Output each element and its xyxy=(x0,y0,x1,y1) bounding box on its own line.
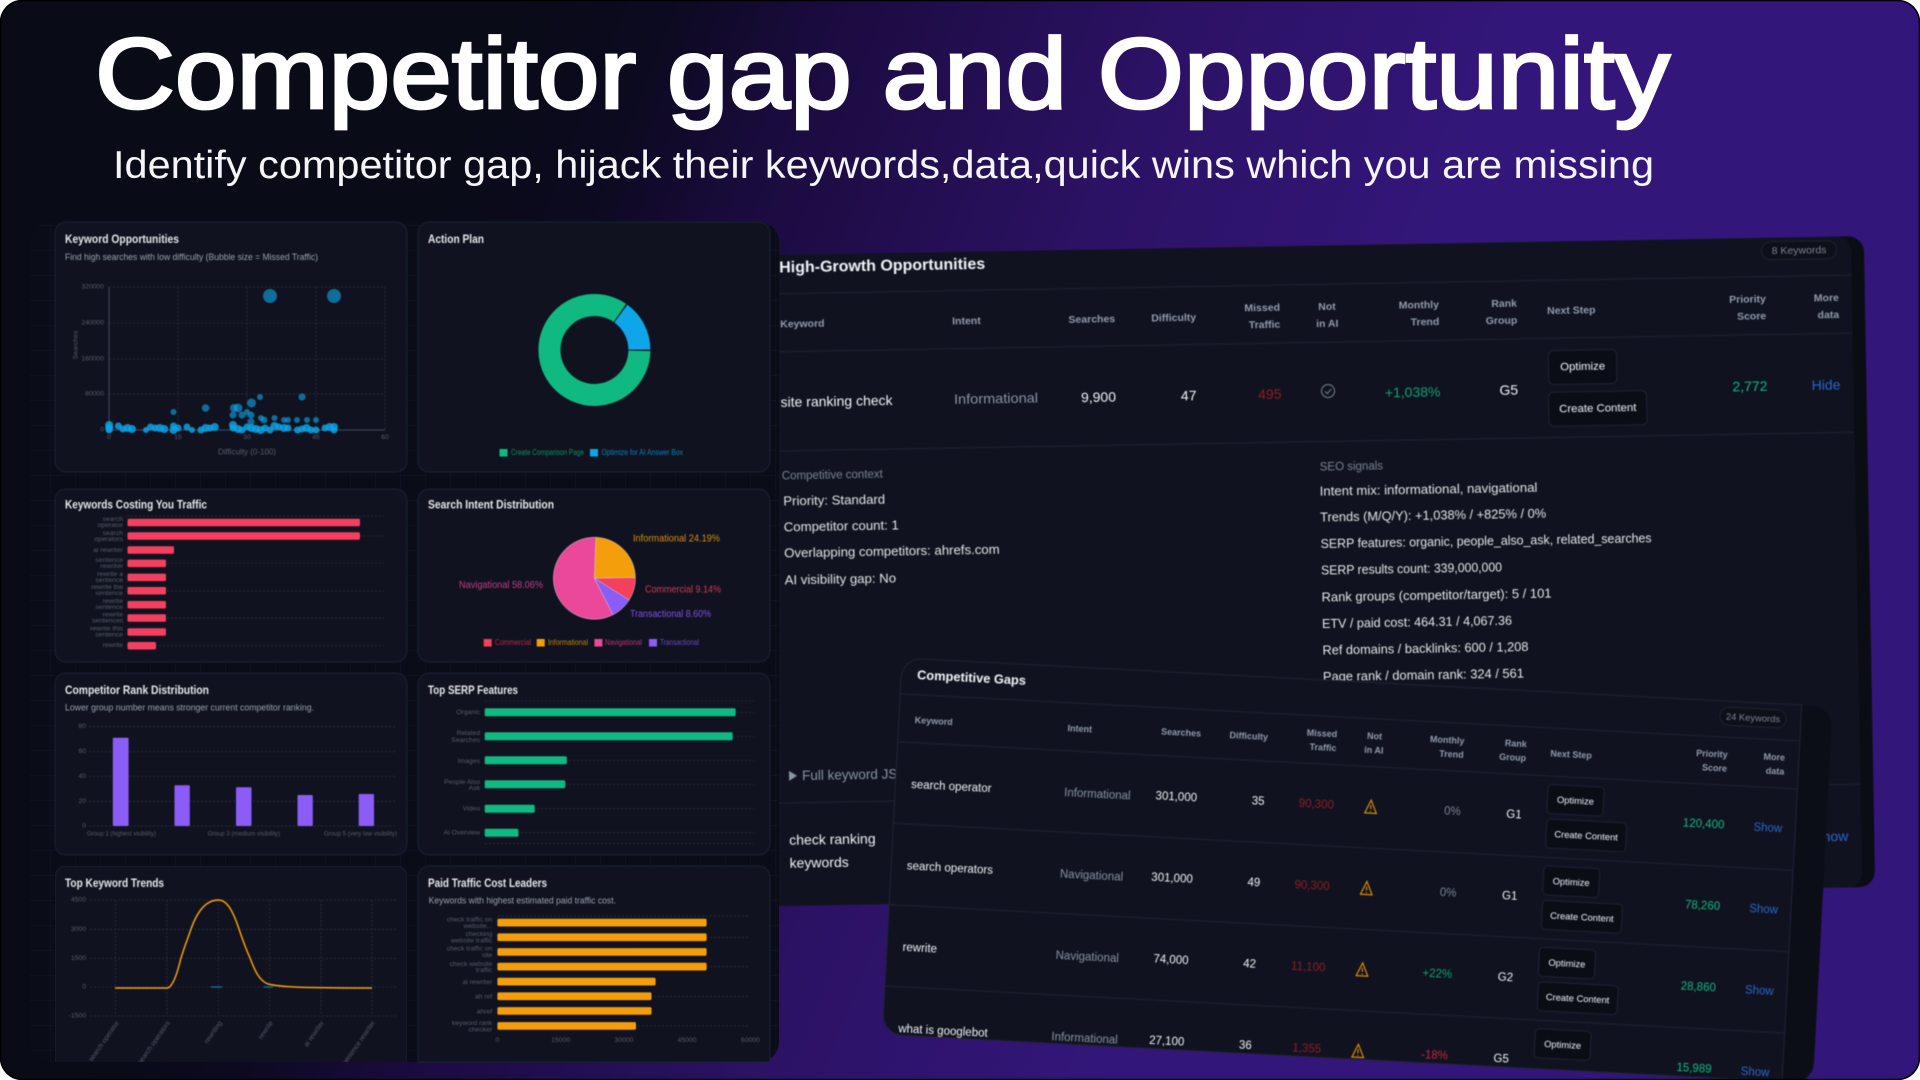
table row: search operator: 0% xyxy=(1444,805,1461,818)
horizontal bar chart: rewrite xyxy=(103,612,123,618)
table row: search operator: Show xyxy=(1753,822,1783,835)
line chart: 0 xyxy=(82,984,86,990)
horizontal bar chart: operator xyxy=(98,522,124,529)
horizontal bar chart: 0 xyxy=(496,1037,500,1044)
table row: check ranking keywords: Show xyxy=(1813,828,1849,845)
table row: check ranking keywords xyxy=(789,832,1849,872)
button: Optimize xyxy=(1542,866,1600,898)
table row: what is googlebot: 36 xyxy=(1239,1040,1252,1052)
table row: rewrite: rewrite xyxy=(902,942,937,956)
table row: site ranking check: 2,772 xyxy=(1732,378,1768,394)
pie labels: Transactional 8.60% xyxy=(630,609,711,620)
table row: site ranking check: Informational xyxy=(954,390,1038,407)
table header row: Trend xyxy=(1439,748,1464,760)
pie labels: Navigational 58.06% xyxy=(459,580,543,591)
horizontal bar chart: Video xyxy=(463,806,480,812)
heading: Competitor Rank Distribution xyxy=(65,685,209,697)
button: Optimize: Optimize xyxy=(1560,361,1605,373)
horizontal bar chart: rewrite the xyxy=(91,584,123,591)
table header row: Not xyxy=(1367,731,1382,742)
horizontal bar chart: ah ref xyxy=(475,994,492,1000)
column chart: 80 xyxy=(78,723,86,730)
detail: SEO signals: ETV / paid cost: 464.31 / 4,067.36 xyxy=(1322,613,1512,631)
horizontal bar chart xyxy=(444,701,754,844)
horizontal bar chart: Organic xyxy=(456,709,481,716)
horizontal bar chart: sentence xyxy=(95,557,123,564)
button: Optimize: Optimize xyxy=(1548,957,1586,970)
table header row: Rank xyxy=(1491,298,1517,310)
horizontal bar chart xyxy=(90,516,384,650)
detail: competitive context: Competitive context xyxy=(782,469,884,483)
legend: Informational xyxy=(548,638,588,647)
horizontal bar chart: rewrite this xyxy=(90,626,124,632)
button: Optimize: Optimize xyxy=(1552,875,1590,888)
table row: site ranking check: 47 xyxy=(1181,387,1197,404)
horizontal bar chart: Related xyxy=(457,730,480,737)
keyword count badge xyxy=(1720,707,1786,728)
table row: what is googlebot: what is googlebot xyxy=(897,1023,989,1040)
horizontal bar chart: website... xyxy=(463,923,492,930)
disclosure: full keyword JSON: Full keyword JSON xyxy=(802,766,918,783)
table header row: Keyword xyxy=(780,318,825,331)
scatter chart: 80000 xyxy=(85,390,104,398)
button: Create Content xyxy=(1548,391,1647,426)
icon: warning triangle xyxy=(1356,963,1368,976)
table row: what is googlebot: 1,355 xyxy=(1292,1042,1321,1056)
title: Competitor gap and Opportunity xyxy=(95,18,1670,130)
table row: search operator: Informational xyxy=(1064,787,1131,803)
horizontal bar chart: rewrite xyxy=(103,642,123,649)
detail: SEO signals: Intent mix: informational, navigational xyxy=(1320,480,1538,499)
detail: SEO signals: SEO signals xyxy=(1320,460,1383,474)
table header row: Not xyxy=(1318,301,1336,313)
horizontal bar chart: Ask xyxy=(469,785,481,792)
horizontal bar chart: Ai Overview xyxy=(444,830,480,836)
column chart: Group 1 (highest visibility) xyxy=(87,830,156,838)
table header row: Score xyxy=(1737,310,1766,323)
line chart: 3000 xyxy=(71,926,86,933)
horizontal bar chart: People Also xyxy=(444,779,480,786)
table row: site ranking check xyxy=(780,349,1840,427)
table row: site ranking check: Hide xyxy=(1811,376,1841,393)
table header row: Group xyxy=(1486,315,1517,327)
table header row: Score xyxy=(1702,762,1727,774)
horizontal bar chart: checking xyxy=(465,931,493,938)
horizontal bar chart: Searches xyxy=(451,737,481,744)
table row: rewrite: 42 xyxy=(1243,958,1256,971)
table header row: in AI xyxy=(1316,318,1339,330)
table row: search operators: 0% xyxy=(1440,887,1457,900)
horizontal bar chart: 15000 xyxy=(551,1037,570,1044)
horizontal bar chart: rewrite a xyxy=(97,571,123,578)
horizontal bar chart: keyword rank xyxy=(452,1020,493,1027)
table header row: Difficulty xyxy=(1151,312,1196,325)
line chart: search operator xyxy=(88,1019,121,1063)
legend xyxy=(484,638,699,647)
table header row: Difficulty xyxy=(1229,730,1268,742)
legend: Navigational xyxy=(605,638,642,647)
button: Create Content xyxy=(1541,900,1623,933)
heading: Keywords Costing You Traffic xyxy=(65,500,208,512)
horizontal bar chart: operators xyxy=(94,536,124,543)
horizontal bar chart: ahref xyxy=(477,1008,492,1016)
heading: Top SERP Features xyxy=(428,685,518,697)
table row: search operators: Navigational xyxy=(1060,868,1123,884)
disclosure: full keyword JSON xyxy=(788,768,896,783)
table header row: Searches xyxy=(1161,727,1201,739)
detail: SEO signals: Page rank / domain rank: 324 / 561 xyxy=(1323,666,1524,684)
button: Create Content: Create Content xyxy=(1554,828,1619,843)
scatter chart: 45 xyxy=(312,434,320,441)
table row: search operators: 90,300 xyxy=(1294,879,1330,893)
column chart: Group 3 (medium visibility) xyxy=(208,830,280,838)
panel: Keywords Costing You Traffic xyxy=(55,489,407,662)
table row: search operator: 301,000 xyxy=(1155,790,1197,805)
button: Create Content: Create Content xyxy=(1559,402,1637,415)
panel: High-Growth Opportunities table xyxy=(739,236,1875,907)
line chart: 1500 xyxy=(71,955,86,962)
legend: Optimize for AI Answer Box xyxy=(602,448,683,457)
table header row: Rank xyxy=(1505,738,1528,749)
heading: Top Keyword Trends xyxy=(65,878,164,890)
panel: Competitive Gaps table xyxy=(882,658,1833,1080)
detail: competitive context: Priority: Standard xyxy=(783,492,885,508)
table header row: Priority xyxy=(1729,293,1766,306)
detail: SEO signals: SERP features: organic, people_also_ask, related_searches xyxy=(1320,530,1652,551)
scatter chart: 240000 xyxy=(81,320,104,326)
table header row: Intent xyxy=(1067,723,1092,734)
icon: check circle xyxy=(1321,384,1335,398)
column chart xyxy=(78,723,397,838)
column chart: Group 5 (very low visibility) xyxy=(324,830,397,838)
horizontal bar chart: 60000 xyxy=(741,1037,760,1044)
line chart: rewriting xyxy=(203,1020,224,1045)
scatter chart: 160000 xyxy=(81,356,104,362)
table row: what is googlebot: G5 xyxy=(1493,1053,1509,1066)
detail: competitive context: Overlapping competitors: ahrefs.com xyxy=(784,542,1000,560)
scatter chart: 0 xyxy=(100,426,104,434)
icon: warning triangle xyxy=(1365,800,1377,813)
detail: SEO signals: Rank groups (competitor/target): 5 / 101 xyxy=(1321,586,1552,605)
line chart: sentence rewriter xyxy=(341,1019,377,1067)
table header row: Traffic xyxy=(1249,319,1281,331)
horizontal bar chart: website traffic xyxy=(450,938,493,944)
table row: site ranking check: G5 xyxy=(1499,382,1518,398)
button: Create Content xyxy=(1545,819,1627,852)
pie chart xyxy=(553,537,635,619)
table row: what is googlebot: Informational xyxy=(1051,1031,1118,1047)
button: Optimize xyxy=(1548,349,1617,385)
table row: search operator: 90,300 xyxy=(1298,798,1334,812)
horizontal bar chart: Images xyxy=(458,758,481,765)
table header row: Missed xyxy=(1244,302,1280,314)
horizontal bar chart: sentences xyxy=(92,618,124,624)
table row: what is googlebot xyxy=(897,995,1772,1080)
scatter chart: Difficulty (0-100) xyxy=(218,448,276,456)
table row: check ranking keywords: check ranking xyxy=(789,830,876,848)
panel: Action Plan xyxy=(418,222,770,472)
horizontal bar chart xyxy=(447,916,760,1044)
horizontal bar chart: checker xyxy=(468,1026,493,1034)
horizontal bar chart: 45000 xyxy=(678,1037,697,1044)
table header row: Intent xyxy=(952,315,981,328)
table row: search operators: 301,000 xyxy=(1151,872,1193,886)
table row: search operator: 120,400 xyxy=(1683,817,1725,832)
horizontal bar chart: rewriter xyxy=(100,563,124,570)
button: Optimize xyxy=(1534,1029,1591,1060)
horizontal bar chart: sentence xyxy=(95,632,123,638)
horizontal bar chart: traffic xyxy=(476,967,493,974)
scatter chart: 15 xyxy=(174,434,182,441)
table row: rewrite: +22% xyxy=(1422,968,1452,981)
table heading: Competitive Gaps xyxy=(917,667,1026,688)
table row: search operators: search operators xyxy=(906,860,994,877)
panel: Top SERP Features xyxy=(418,673,770,855)
detail: SEO signals: SERP results count: 339,000,000 xyxy=(1321,559,1502,578)
legend xyxy=(500,448,683,457)
heading: Keyword Opportunities xyxy=(65,234,179,246)
panel: Paid Traffic Cost Leaders xyxy=(418,866,770,1062)
column chart: 60 xyxy=(78,748,86,755)
table row: site ranking check: site ranking check xyxy=(780,392,894,410)
table header row: data xyxy=(1817,309,1839,321)
heading: Paid Traffic Cost Leaders xyxy=(428,878,547,890)
table row: rewrite xyxy=(901,914,1776,1023)
table header row: Traffic xyxy=(1309,742,1337,753)
panel: Competitor Rank Distribution xyxy=(55,673,407,855)
subtitle: Identify competitor gap, hijack their keywords,data,quick wins which you are missing xyxy=(113,144,1654,187)
table row: rewrite: G2 xyxy=(1497,972,1513,984)
table header row: Priority xyxy=(1696,748,1728,760)
table header row: in AI xyxy=(1364,745,1384,756)
table header row: Monthly xyxy=(1430,734,1465,746)
table header row: More xyxy=(1814,292,1839,304)
button: Optimize xyxy=(1547,784,1604,816)
table row: site ranking check: 495 xyxy=(1258,386,1282,402)
scatter chart: Searches xyxy=(72,330,80,359)
table row: what is googlebot: -18% xyxy=(1421,1049,1448,1063)
table header row: Searches xyxy=(1068,313,1115,326)
button: Optimize: Optimize xyxy=(1557,794,1594,807)
table row: what is googlebot: 27,100 xyxy=(1149,1035,1185,1049)
horizontal bar chart: sentence xyxy=(95,590,123,597)
horizontal bar chart: check traffic on xyxy=(447,946,493,952)
table header row: data xyxy=(1766,766,1786,777)
table heading: High-Growth Opportunities xyxy=(779,256,985,276)
button: Create Content: Create Content xyxy=(1546,991,1610,1005)
horizontal bar chart: check website xyxy=(450,961,493,968)
line chart: ai rewriter xyxy=(303,1019,326,1048)
legend: Transactional xyxy=(660,638,699,647)
panel: Keyword Opportunities xyxy=(55,222,407,472)
horizontal bar chart: site xyxy=(482,952,493,959)
detail: competitive context: AI visibility gap: No xyxy=(785,571,896,587)
column chart: 20 xyxy=(78,798,86,805)
scatter chart: 320000 xyxy=(81,284,104,290)
line chart: 4500 xyxy=(71,896,86,904)
table header row: Next Step xyxy=(1550,748,1593,761)
donut chart xyxy=(549,305,639,395)
horizontal bar chart: 30000 xyxy=(615,1037,634,1044)
icon: warning triangle xyxy=(1352,1044,1364,1058)
keyword count badge: 8 Keywords xyxy=(1772,244,1827,257)
table row: site ranking check: +1,038% xyxy=(1385,383,1441,400)
scatter chart xyxy=(72,284,389,456)
table row: search operators: Show xyxy=(1749,903,1779,917)
table row: rewrite: 74,000 xyxy=(1153,953,1189,967)
table header row: More xyxy=(1763,752,1785,763)
table header row xyxy=(914,707,1786,777)
horizontal bar chart: search xyxy=(103,516,123,523)
horizontal bar chart: sentence xyxy=(95,604,123,611)
pie labels xyxy=(459,534,721,620)
detail: competitive context xyxy=(782,467,1000,587)
detail: competitive context: Competitor count: 1 xyxy=(784,517,899,534)
button: Create Content: Create Content xyxy=(1550,910,1614,924)
table row: search operators: 49 xyxy=(1247,877,1261,889)
scatter chart: 60 xyxy=(381,434,389,441)
icon: warning triangle xyxy=(1360,881,1373,895)
table header row: Monthly xyxy=(1399,299,1439,312)
table header row: Missed xyxy=(1306,728,1337,739)
scatter chart: 30 xyxy=(243,434,251,441)
pie labels: Informational 24.19% xyxy=(633,534,720,544)
column chart: 0 xyxy=(82,822,86,830)
detail: SEO signals xyxy=(1319,456,1654,684)
table header row: Keyword xyxy=(915,715,953,727)
table row: rewrite: 28,860 xyxy=(1680,981,1716,994)
heading: Action Plan xyxy=(428,234,484,246)
button: Optimize xyxy=(1538,947,1596,979)
column chart: 40 xyxy=(78,773,86,780)
subheading: Keywords with highest estimated paid traffic cost. xyxy=(429,896,616,906)
table row: rewrite: Navigational xyxy=(1055,950,1119,965)
line chart: -1500 xyxy=(69,1012,86,1020)
table row: search operators: 78,260 xyxy=(1685,899,1720,913)
table row: rewrite: 11,100 xyxy=(1291,961,1326,974)
table header row: Group xyxy=(1499,752,1527,763)
panel: Search Intent Distribution xyxy=(418,489,770,662)
panel: Top Keyword Trends xyxy=(55,866,407,1080)
table row: what is googlebot: Show xyxy=(1740,1066,1770,1079)
line chart: rewrite xyxy=(257,1020,275,1041)
table header row xyxy=(780,294,1840,330)
horizontal bar chart: search xyxy=(103,530,123,537)
table row: what is googlebot: 15,989 xyxy=(1676,1062,1712,1076)
button: Create Content xyxy=(1537,982,1618,1015)
table header row: Trend xyxy=(1411,316,1439,328)
heading: Search Intent Distribution xyxy=(428,500,554,512)
line chart xyxy=(69,896,397,1067)
panel: dashboard backdrop xyxy=(30,222,779,1062)
table row: search operators xyxy=(905,832,1780,942)
keyword count badge: 24 Keywords xyxy=(1726,711,1781,724)
detail: SEO signals: Trends (M/Q/Y): +1,038% / +825% / 0% xyxy=(1320,506,1546,525)
table row: search operator: 35 xyxy=(1251,795,1265,808)
horizontal bar chart: sentence xyxy=(95,577,123,584)
scatter chart: 0 xyxy=(107,434,111,441)
line chart: search operators xyxy=(137,1020,172,1066)
table header row: Next Step xyxy=(1547,304,1596,317)
table row: search operator: search operator xyxy=(911,779,992,795)
horizontal bar chart: check traffic on xyxy=(447,916,493,924)
horizontal bar chart: ai rewriter xyxy=(93,547,124,554)
button: Optimize: Optimize xyxy=(1544,1038,1581,1051)
legend: Create Comparison Page xyxy=(511,448,584,457)
table row: search operators: G1 xyxy=(1502,890,1518,903)
horizontal bar chart: ai rewriter xyxy=(462,979,493,986)
table row: check ranking keywords: keywords xyxy=(789,854,849,871)
legend: Commercial xyxy=(495,638,531,647)
keyword count badge xyxy=(1761,241,1837,260)
table row: search operator: G1 xyxy=(1506,809,1522,822)
table row: site ranking check: 9,900 xyxy=(1081,389,1116,405)
subheading: Find high searches with low difficulty (Bubble size = Missed Traffic) xyxy=(65,252,318,262)
horizontal bar chart: rewrite xyxy=(103,598,123,605)
table row: search operator xyxy=(910,751,1785,860)
table row: rewrite: Show xyxy=(1745,984,1775,998)
pie labels: Commercial 9.14% xyxy=(645,584,721,596)
detail: SEO signals: Ref domains / backlinks: 600 / 1,208 xyxy=(1322,639,1529,658)
subheading: Lower group number means stronger current competitor ranking. xyxy=(65,703,314,713)
